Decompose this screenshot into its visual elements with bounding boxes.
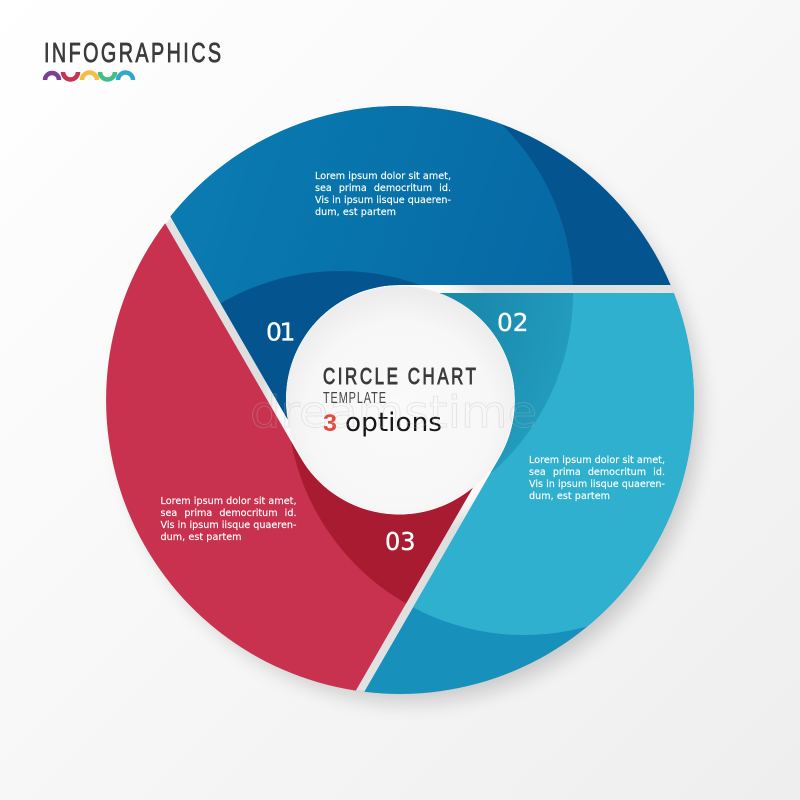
segment 03: red xyxy=(106,223,473,691)
centre heading xyxy=(323,363,476,438)
heading word: options: options xyxy=(345,408,442,438)
heading line: circle chart: CIRCLE CHART xyxy=(323,363,476,390)
gaps between segments xyxy=(107,107,693,693)
text block: segment 01: Vis in ipsum iisque quaeren- xyxy=(315,195,451,206)
text block: segment 03: sea prima democritum id. xyxy=(160,508,296,519)
text block: segment 03 xyxy=(160,496,296,543)
text block: segment 03: Vis in ipsum iisque quaeren- xyxy=(160,520,296,531)
text block: segment 02 xyxy=(529,455,665,502)
text block: segment 01: Lorem ipsum dolor sit amet, xyxy=(315,171,451,182)
text block: segment 02: sea prima democritum id. xyxy=(529,467,665,478)
text block: segment 03: dum, est partem xyxy=(160,532,242,543)
heading line: template: TEMPLATE xyxy=(323,389,386,407)
text block: segment 03: Lorem ipsum dolor sit amet, xyxy=(160,496,296,507)
number 02: 02 xyxy=(497,308,528,337)
segment 01: blue xyxy=(170,106,671,420)
text block: segment 02: Vis in ipsum iisque quaeren- xyxy=(529,479,665,490)
number 03: 03 xyxy=(385,527,416,556)
icon: coloured wave xyxy=(45,72,133,80)
text block: segment 02: dum, est partem xyxy=(529,491,610,502)
text block: segment 01: sea prima democritum id. xyxy=(315,183,451,194)
text block: segment 01: dum, est partem xyxy=(315,207,396,218)
chart drop shadow xyxy=(120,122,700,702)
number 01: 01 xyxy=(266,318,295,346)
watermark: dreamstime xyxy=(250,387,537,438)
logo wordmark: INFOGRAPHICS xyxy=(44,38,221,69)
title: infographics logo xyxy=(44,38,221,80)
heading number: 3: 3 xyxy=(323,410,337,437)
text block: segment 02: Lorem ipsum dolor sit amet, xyxy=(529,455,665,466)
text block: segment 01 xyxy=(315,171,451,218)
segment 02: cyan xyxy=(364,293,694,694)
circle chart xyxy=(106,106,708,710)
centre circle xyxy=(286,286,514,514)
